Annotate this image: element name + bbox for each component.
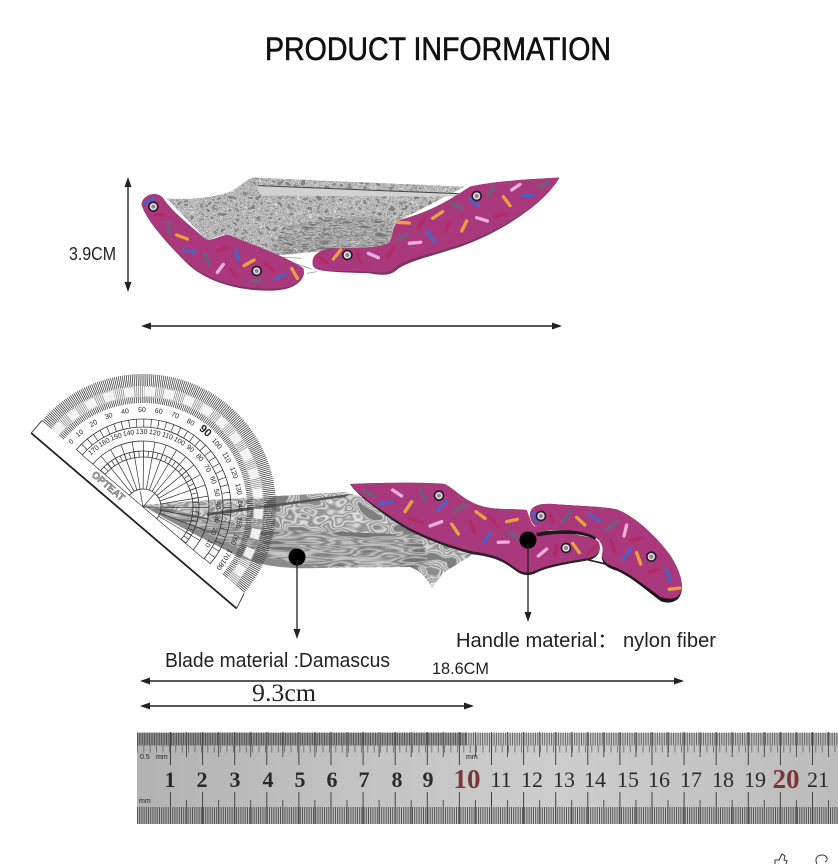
outer degree scale: 90	[197, 423, 214, 440]
blade edge bevel	[142, 505, 320, 568]
outer degree scale: 110	[220, 451, 232, 464]
outer degree scale: 0	[68, 438, 76, 446]
ruler numbers: 5	[294, 767, 306, 792]
ruler small labels: 0.5	[140, 754, 150, 761]
outer degree scale: 170	[221, 547, 233, 561]
protractor brand: OPTEAT	[89, 470, 126, 504]
arrow: blade length	[140, 702, 474, 710]
screws	[434, 490, 657, 562]
inner degree scale: 80	[194, 453, 204, 463]
icon: thumbs up outline, cropped	[775, 854, 787, 864]
outer degree scale: 100	[210, 437, 223, 451]
ruler numbers: 19	[744, 767, 766, 792]
label: 3.9CM: 3.9CM	[69, 244, 116, 264]
ruler numbers: 17	[680, 767, 702, 792]
blade fuller groove	[258, 186, 458, 197]
ruler numbers: 21	[807, 767, 829, 792]
ruler numbers: 6	[326, 767, 338, 792]
ruler numbers: 1	[164, 767, 176, 792]
ruler numbers	[164, 764, 829, 794]
outer degree scale: 160	[229, 532, 239, 546]
inner degree scale	[87, 397, 252, 554]
ruler body	[137, 733, 838, 824]
ruler small labels	[139, 754, 478, 805]
outer degree scale: 150	[234, 516, 243, 529]
inner degree scale: 90	[185, 444, 195, 454]
ruler numbers: 13	[553, 767, 575, 792]
blade: damascus, open knife	[142, 492, 475, 588]
fuller dark line	[258, 186, 458, 194]
outer degree scale: 70	[170, 411, 180, 421]
inner rings	[76, 383, 267, 564]
ruler numbers: 4	[262, 767, 274, 792]
handle: left scale	[350, 483, 600, 575]
protractor base edge	[31, 421, 247, 608]
inner tick band	[62, 356, 294, 576]
inner degree scale: 50	[212, 488, 220, 497]
icon: comment outline, cropped	[816, 855, 827, 864]
blade: wavy lower pattern	[273, 217, 393, 255]
knife: closed view	[142, 178, 559, 291]
ruler small labels: mm	[466, 754, 478, 761]
ruler numbers: 16	[648, 767, 670, 792]
ruler numbers: 20	[772, 764, 800, 794]
ruler small labels: mm	[139, 798, 151, 805]
knife: open view	[142, 483, 682, 603]
inner degree scale: 20	[209, 526, 218, 536]
handle: right scale	[313, 178, 559, 275]
inner degree scale: 70	[202, 463, 212, 474]
outer degree scale: 20	[89, 419, 99, 429]
ruler numbers: 8	[392, 767, 402, 792]
square band	[55, 344, 306, 582]
outer degree scale: 30	[104, 412, 114, 421]
outer degree scale: 60	[154, 408, 163, 416]
ruler small labels: mm	[156, 754, 168, 761]
ruler numbers: 7	[358, 767, 370, 792]
inner degree scale: 120	[148, 429, 161, 438]
inner degree scale: 160	[98, 437, 111, 449]
outer degree scale: 50	[138, 407, 146, 414]
outer degree scale: 130	[233, 483, 242, 496]
inner degree scale: 140	[122, 429, 135, 438]
ruler numbers: 11	[490, 767, 512, 792]
ruler numbers: 15	[617, 767, 639, 792]
inner degree scale: 100	[172, 436, 186, 448]
steel ruler	[137, 733, 838, 824]
arrow: total length	[140, 678, 684, 684]
inner degree scale: 150	[110, 432, 123, 443]
inner degree scale: 170	[87, 444, 101, 457]
arrow: closed length	[141, 322, 562, 330]
blade: damascus, closed knife	[167, 178, 465, 256]
outer degree scale: 120	[228, 466, 239, 480]
label: 18.6CM: 18.6CM	[432, 659, 489, 678]
ruler numbers: 12	[521, 767, 543, 792]
handle: right scale	[530, 504, 682, 603]
spokes	[82, 405, 247, 559]
protractor	[31, 324, 330, 609]
pivot wires	[277, 257, 317, 273]
callout: handle material pointer	[520, 532, 536, 622]
callout: blade material pointer	[288, 548, 306, 639]
inner degree scale: 130	[136, 429, 148, 436]
inner degree scale: 60	[208, 475, 217, 485]
ruler numbers: 2	[196, 767, 208, 792]
ruler bottom millimetre ticks	[137, 808, 838, 816]
inner degree scale: 40	[214, 502, 221, 510]
inner degree scale: 30	[212, 514, 221, 523]
arrow: knife width dimension 3.9cm	[124, 177, 132, 292]
outer degree scale: 40	[121, 408, 130, 416]
ruler numbers: 9	[422, 767, 434, 792]
outer degree scale: 180	[214, 557, 227, 571]
outer degree scale: 10	[75, 429, 85, 439]
ruler numbers: 18	[712, 767, 734, 792]
inner degree scale: 110	[161, 431, 174, 442]
inner degree scale: 10	[203, 538, 213, 548]
ruler numbers: 10	[454, 764, 480, 794]
blade fuller groove	[207, 494, 350, 516]
label: handle material: Handle material： nylon fiber	[456, 630, 716, 652]
screws	[148, 191, 482, 276]
outer degree scale: 140	[236, 500, 243, 512]
label: 9.3cm: 9.3cm	[252, 680, 317, 707]
outer degree scale	[68, 363, 287, 571]
ruler top millimetre ticks	[137, 739, 838, 749]
outer degree scale: 80	[185, 418, 195, 428]
handle group, open knife	[350, 483, 682, 603]
title: PRODUCT INFORMATION	[265, 31, 611, 67]
handle: left scale	[142, 194, 304, 291]
ruler numbers: 3	[230, 767, 240, 792]
outer tick band	[46, 328, 322, 589]
dark groove between scales	[537, 532, 596, 538]
label: blade material: Blade material :Damascus	[165, 650, 390, 672]
ruler numbers: 14	[584, 767, 606, 792]
lower edge black line	[588, 560, 620, 569]
blade: wavy lower pattern	[142, 505, 430, 568]
